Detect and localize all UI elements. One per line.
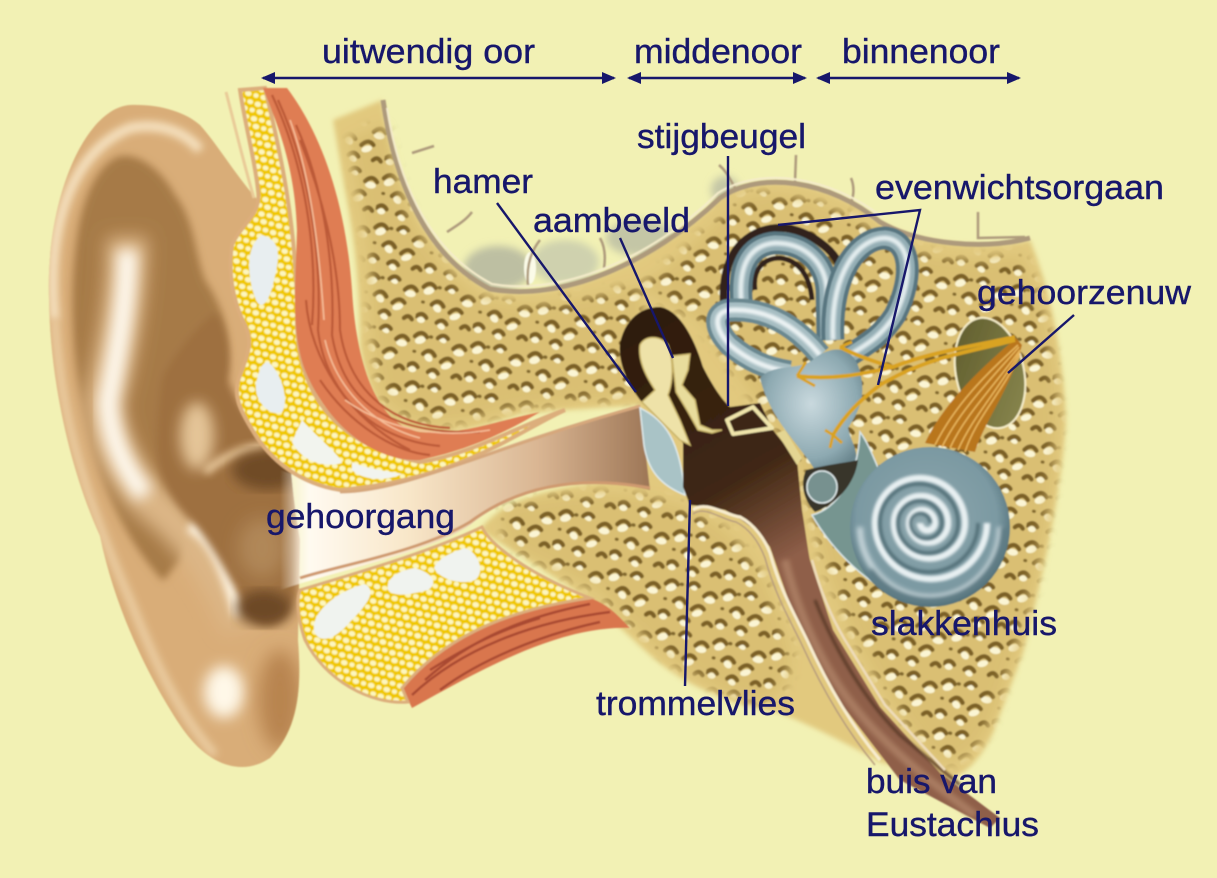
label: hamer: hamer — [433, 163, 533, 201]
upper red muscle — [263, 88, 540, 460]
middle ear cavity and Eustachian tube — [620, 307, 1000, 828]
label: uitwendig oor: uitwendig oor — [322, 33, 535, 71]
bone edge — [383, 100, 1030, 292]
section arrow: uitwendig oor — [263, 77, 614, 79]
label: aambeeld: aambeeld — [533, 202, 690, 240]
fat vessels — [249, 235, 278, 305]
brain surface — [412, 146, 1025, 290]
anvil — [672, 354, 722, 433]
ossicles — [640, 338, 802, 465]
leader: gehoorzenuw — [1008, 315, 1074, 373]
upper fat layer — [231, 88, 565, 490]
label: stijgbeugel: stijgbeugel — [637, 118, 806, 156]
outer ear — [40, 100, 310, 780]
temporal bone — [330, 100, 1070, 790]
label: buis van Eustachius: buis van — [866, 763, 997, 801]
leader lines — [497, 156, 1074, 686]
stirrup — [727, 407, 772, 434]
skin strip above fat — [226, 92, 254, 198]
nerve branches — [797, 337, 1015, 435]
label: gehoorgang: gehoorgang — [266, 498, 455, 536]
leader: trommelvlies — [685, 500, 690, 686]
label: buis van Eustachius — [866, 763, 1039, 844]
concha — [157, 312, 297, 625]
leader: stijgbeugel — [727, 156, 729, 406]
lower red muscle — [402, 598, 630, 708]
eardrum — [640, 408, 685, 495]
inner ear — [718, 228, 1010, 607]
label: trommelvlies: trommelvlies — [596, 685, 795, 723]
ear canal — [280, 405, 650, 590]
label: slakkenhuis: slakkenhuis — [871, 605, 1057, 643]
label: buis van Eustachius: Eustachius — [866, 806, 1039, 844]
label: middenoor: middenoor — [634, 33, 802, 71]
cochlear base — [812, 432, 900, 597]
auditory nerve opening — [797, 311, 1035, 452]
label: evenwichtsorgaan: evenwichtsorgaan — [875, 169, 1164, 207]
label: gehoorzenuw: gehoorzenuw — [977, 274, 1191, 312]
label: binnenoor: binnenoor — [842, 33, 1000, 71]
section arrow: middenoor — [629, 77, 805, 79]
leader: aambeeld — [620, 238, 673, 358]
leader: evenwichtsorgaan — [778, 210, 920, 385]
ear anatomy illustration — [40, 88, 1070, 828]
section arrow: binnenoor — [818, 77, 1019, 79]
semicircular canals — [718, 238, 907, 372]
cochlea — [850, 447, 1010, 607]
lower fat layer — [298, 527, 590, 702]
leader: hamer — [497, 203, 636, 392]
hammer — [640, 338, 690, 445]
vestibule — [760, 350, 862, 470]
dark surround of canals — [724, 228, 838, 305]
upper ear fossa — [72, 156, 228, 581]
